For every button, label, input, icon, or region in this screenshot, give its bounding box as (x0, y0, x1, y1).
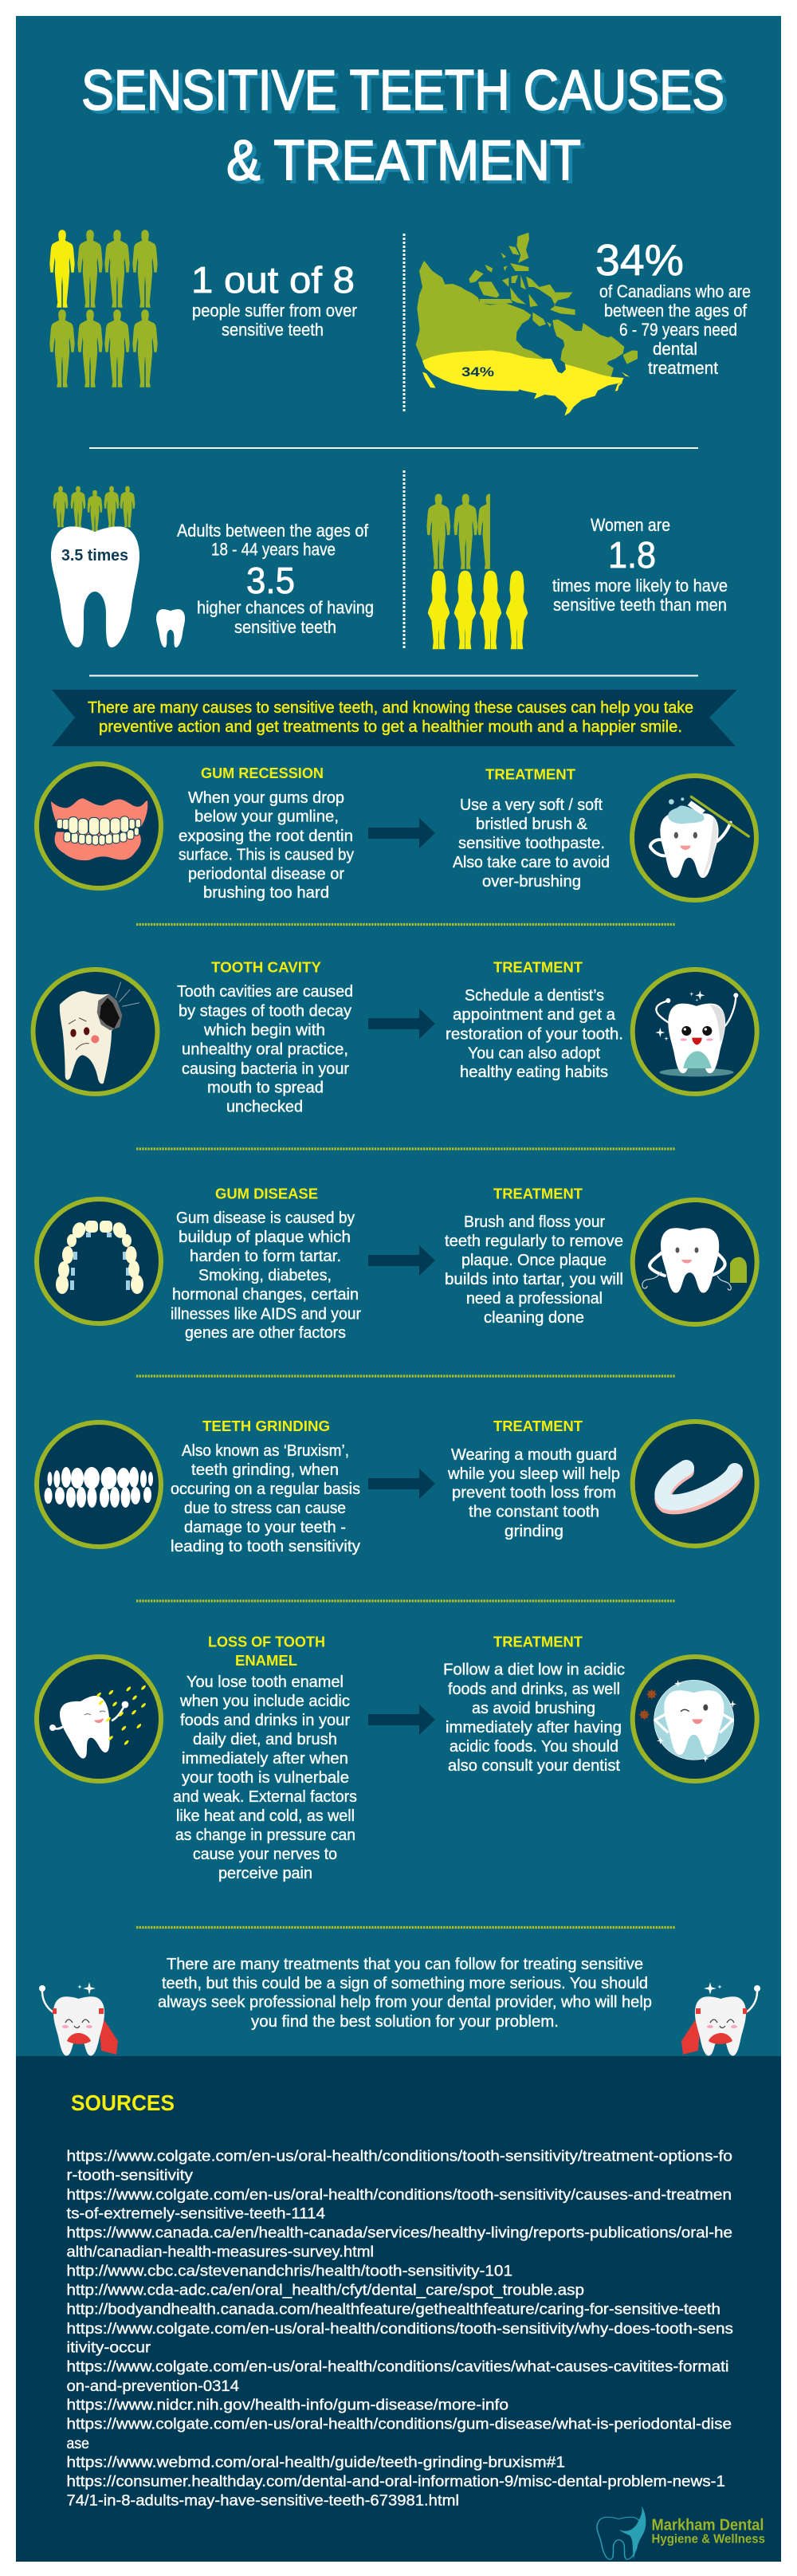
source links: alth/canadian-health-measures-survey.html (67, 2243, 374, 2260)
icon: tooth with floss (633, 1200, 757, 1324)
text: loss of tooth enamel: You lose tooth enamel (186, 1673, 344, 1691)
text: tooth cavity: unchecked (226, 1098, 303, 1116)
arrow (368, 818, 435, 848)
text: teeth grinding: leading to tooth sensitivity (171, 1537, 361, 1555)
stat: 34% of Canadians: 6 - 79 years need (619, 320, 737, 340)
source links: https://www.webmd.com/oral-health/guide/teeth-grinding-bruxism#1 (67, 2454, 565, 2472)
arrow (368, 1245, 435, 1276)
icon: tooth losing enamel (37, 1657, 161, 1781)
icon: grinding teeth (37, 1422, 161, 1547)
stat: women 1.8: 1.8 (608, 534, 656, 576)
source links: on-and-prevention-0314 (67, 2377, 239, 2395)
panel: sources (16, 2056, 781, 2562)
text: loss of tooth enamel: daily diet, and brush (193, 1730, 337, 1748)
source links: https://www.nidcr.nih.gov/health-info/gum-disease/more-info (67, 2397, 508, 2414)
text: loss of tooth enamel: as change in pressure can (175, 1826, 355, 1844)
stat: 1 out of 8: 1 out of 8 (191, 259, 355, 301)
text: enamel treatment: foods and drinks, as well (448, 1680, 620, 1698)
icon: superhero tooth right (681, 1982, 760, 2055)
source links: http://bodyandhealth.canada.com/healthfeature/gethealthfeature/caring-for-sensitive-teeth (67, 2300, 720, 2318)
text: gum disease: harden to form tartar. (190, 1247, 341, 1265)
text: gum recession: When your gums drop (188, 789, 344, 807)
text: loss of tooth enamel: like heat and cold, as well (176, 1807, 355, 1825)
text: tooth cavity: Tooth cavities are caused (177, 982, 353, 1001)
text: teeth grinding: damage to your teeth - (184, 1518, 346, 1536)
text: teeth grinding treatment: grinding (505, 1522, 563, 1540)
stat: women 1.8: times more likely to have (552, 576, 728, 596)
closing text: teeth, but this could be a sign of something more serious. You should (162, 1974, 648, 1992)
text: gum disease: illnesses like AIDS and your (171, 1304, 361, 1323)
stat: 34% of Canadians: dental (653, 339, 697, 359)
stat: 1 out of 8: people suffer from over (192, 301, 357, 321)
text: tooth cavity treatment: healthy eating habits (460, 1063, 608, 1081)
source links: https://www.canada.ca/en/health-canada/services/healthy-living/reports-publications/oral-he (67, 2224, 732, 2242)
text: tooth cavity: which begin with (203, 1021, 325, 1040)
text: tooth cavity treatment: restoration of your tooth. (446, 1025, 623, 1043)
source links: itivity-occur (67, 2339, 151, 2357)
text: loss of tooth enamel: perceive pain (218, 1864, 312, 1882)
text: gum disease: GUM DISEASE (215, 1185, 318, 1202)
stat: 3.5 higher chances: Adults between the ages of (177, 521, 369, 541)
text: gum disease treatment: builds into tartar, you will (445, 1270, 623, 1288)
closing text: There are many treatments that you can follow for treating sensitive (167, 1955, 643, 1973)
closing text: always seek professional help from your dental provider, who will help (158, 1993, 652, 2012)
closing text: you find the best solution for your problem. (251, 2012, 559, 2031)
closing text (158, 1955, 652, 2031)
text: teeth grinding: teeth grinding, when (191, 1461, 339, 1479)
stat: 3.5 higher chances: sensitive teeth (234, 617, 336, 637)
text: loss of tooth enamel: foods and drinks in your (180, 1711, 350, 1729)
icon: small tooth (156, 609, 185, 647)
text: gum recession: below your gumline, (194, 807, 339, 826)
icon: dental arch (37, 1199, 161, 1323)
text: teeth grinding treatment: TREATMENT (493, 1418, 583, 1434)
text: gum disease treatment: TREATMENT (493, 1185, 583, 1202)
text: loss of tooth enamel: LOSS OF TOOTH (208, 1633, 325, 1650)
text: loss of tooth enamel: and weak. External factors (173, 1787, 357, 1806)
source links: ase (67, 2435, 89, 2452)
text: gum disease: hormonal changes, certain (172, 1285, 359, 1304)
source links: 74/1-in-8-adults-may-have-sensitive-teeth-673981.html (67, 2491, 459, 2509)
text: loss of tooth enamel: your tooth is vulnerbale (182, 1768, 349, 1787)
source links: https://www.colgate.com/en-us/oral-health/conditions/tooth-sensitivity/causes-and-treatmen (67, 2186, 732, 2204)
text: gum recession: brushing too hard (203, 883, 329, 902)
text: gum disease: Smoking, diabetes, (198, 1266, 332, 1284)
text: enamel treatment: Follow a diet low in acidic (443, 1661, 625, 1679)
banner: There are many causes to sensitive teeth, and knowing these causes can help you take (88, 698, 693, 717)
source links: http://www.cda-adc.ca/en/oral_health/cfyt/dental_care/spot_trouble.asp (67, 2282, 584, 2299)
icon: big tooth with people (51, 486, 139, 647)
icon: eight people, one highlighted (50, 230, 157, 387)
text: gum recession: surface. This is caused by (179, 845, 355, 864)
text: gum recession treatment (453, 765, 610, 891)
text: gum disease: buildup of plaque which (179, 1228, 351, 1246)
text: gum disease treatment: need a professional (466, 1289, 603, 1308)
text: tooth cavity treatment (446, 958, 623, 1081)
source links (67, 2148, 733, 2509)
text: tooth cavity: unhealthy oral practice, (182, 1040, 348, 1059)
text: loss of tooth enamel (173, 1633, 357, 1882)
map label: 34%: 34% (461, 364, 494, 380)
stat: women 1.8 (552, 515, 728, 615)
stat: women 1.8: Women are (591, 515, 670, 535)
text: gum recession treatment: TREATMENT (485, 765, 576, 783)
source links: https://www.colgate.com/en-us/oral-health/conditions/cavities/what-causes-cavitites-formati (67, 2358, 728, 2376)
text: enamel treatment: as avoid brushing (472, 1699, 595, 1717)
text: tooth cavity treatment: appointment and get a (453, 1005, 616, 1024)
icon: men and women (427, 494, 527, 648)
source links: http://www.cbc.ca/stevenandchris/health/tooth-sensitivity-101 (67, 2263, 512, 2280)
stat: 3.5 higher chances: 18 - 44 years have (211, 539, 336, 560)
text: loss of tooth enamel: cause your nerves to (193, 1845, 337, 1863)
text: gum disease treatment: teeth regularly to remove (445, 1232, 623, 1250)
text: gum recession treatment: over-brushing (482, 872, 581, 891)
title: & TREATMENT (230, 132, 585, 196)
text: gum recession: exposing the root dentin (179, 827, 353, 845)
text: gum disease (171, 1185, 361, 1342)
text: enamel treatment: immediately after having (446, 1718, 622, 1736)
stat: 3.5 higher chances (177, 521, 374, 637)
stat: 34% of Canadians (595, 235, 751, 378)
text: gum recession treatment: bristled brush & (476, 815, 587, 833)
text: teeth grinding treatment: while you sleep will help (447, 1465, 620, 1483)
stat: 1 out of 8: sensitive teeth (222, 320, 324, 340)
banner (52, 690, 737, 746)
text: gum disease: Gum disease is caused by (176, 1209, 355, 1227)
source links: https://www.colgate.com/en-us/oral-health/conditions/tooth-sensitivity/treatment-options-fo (67, 2148, 732, 2165)
text: gum recession (179, 765, 355, 902)
text: enamel treatment: also consult your dentist (448, 1756, 620, 1775)
title (81, 59, 728, 196)
icon: superhero tooth left (39, 1982, 118, 2055)
text: tooth cavity: by stages of tooth decay (179, 1001, 352, 1021)
icon: tooth with cavity (33, 969, 158, 1094)
logo: Markham Dental: Markham Dental (652, 2517, 764, 2535)
source links: https://www.colgate.com/en-us/oral-health/conditions/tooth-sensitivity/why-does-tooth-sens (67, 2320, 733, 2338)
icon: big tooth with people: 3.5 times (61, 547, 128, 564)
icon: tooth brushing (632, 776, 756, 900)
text: gum recession treatment: Use a very soft / soft (460, 796, 603, 814)
source links: https://www.colgate.com/en-us/oral-health/conditions/gum-disease/what-is-periodontal-dise (67, 2416, 732, 2433)
source links: r-tooth-sensitivity (67, 2166, 193, 2184)
text: teeth grinding treatment: the constant tooth (469, 1503, 599, 1521)
text: tooth cavity: TOOTH CAVITY (211, 958, 322, 976)
arrow (368, 1469, 435, 1499)
text: teeth grinding treatment (447, 1418, 620, 1540)
text: tooth cavity: mouth to spread (207, 1079, 324, 1097)
heading: sources: SOURCES (71, 2090, 175, 2115)
text: teeth grinding: Also known as ‘Bruxism’, (182, 1441, 349, 1460)
title: & TREATMENT (226, 129, 581, 193)
source links: https://consumer.healthday.com/dental-and-oral-information-9/misc-dental-problem-news-1 (67, 2473, 725, 2491)
text: teeth grinding treatment: prevent tooth loss from (452, 1483, 616, 1502)
text: gum recession treatment: Also take care to avoid (453, 853, 610, 871)
text: gum disease treatment: Brush and floss your (464, 1213, 605, 1231)
map: Canada with 34% band (416, 233, 638, 416)
icon: happy tooth (633, 969, 757, 1094)
text: enamel treatment (443, 1633, 625, 1775)
stat: 3.5 higher chances: 3.5 (246, 560, 295, 601)
text: enamel treatment: TREATMENT (493, 1633, 583, 1650)
icon: mouth guard (633, 1422, 757, 1546)
text: enamel treatment: acidic foods. You should (450, 1737, 618, 1756)
icon: dentures (37, 764, 161, 888)
text: tooth cavity treatment: You can also adopt (468, 1044, 600, 1062)
text: teeth grinding treatment: Wearing a mouth guard (451, 1445, 617, 1464)
text: gum recession treatment: sensitive toothpaste. (458, 834, 605, 852)
text: tooth cavity treatment: Schedule a dentist’s (465, 986, 604, 1005)
text: gum disease treatment (445, 1185, 623, 1327)
text: tooth cavity treatment: TREATMENT (493, 958, 583, 976)
text: loss of tooth enamel: immediately after when (182, 1749, 348, 1768)
text: gum disease treatment: plaque. Once plaque (461, 1251, 607, 1269)
text: teeth grinding: TEETH GRINDING (202, 1418, 330, 1434)
stat: women 1.8: sensitive teeth than men (553, 595, 727, 615)
stat: 34% of Canadians: between the ages of (604, 301, 748, 321)
stat: 34% of Canadians: treatment (648, 358, 718, 378)
text: gum recession: periodontal disease or (188, 864, 344, 883)
arrow (368, 1705, 435, 1735)
source links: ts-of-extremely-sensitive-teeth-1114 (67, 2205, 325, 2223)
icon: shiny tooth (633, 1657, 757, 1781)
text: gum recession: GUM RECESSION (201, 765, 324, 781)
stat: 34% of Canadians: 34% (595, 235, 684, 285)
stat: 3.5 higher chances: higher chances of having (197, 598, 374, 617)
text: teeth grinding: occuring on a regular basis (171, 1480, 360, 1498)
stat: 1 out of 8 (191, 259, 357, 340)
text: loss of tooth enamel: when you include acidic (179, 1692, 350, 1710)
text: gum disease: genes are other factors (185, 1323, 346, 1342)
arrow (368, 1009, 435, 1039)
text: loss of tooth enamel: ENAMEL (235, 1652, 297, 1669)
stat: 34% of Canadians: of Canadians who are (599, 281, 751, 301)
text: gum disease treatment: cleaning done (484, 1308, 584, 1327)
text: tooth cavity: causing bacteria in your (182, 1060, 349, 1078)
text: teeth grinding: due to stress can cause (184, 1499, 346, 1517)
banner: preventive action and get treatments to get a healthier mouth and a happier smile. (99, 718, 682, 736)
logo: Markham Dental (597, 2506, 765, 2559)
text: teeth grinding (171, 1418, 361, 1555)
text: tooth cavity (177, 958, 353, 1116)
logo: Markham Dental: Hygiene & Wellness (652, 2533, 765, 2547)
